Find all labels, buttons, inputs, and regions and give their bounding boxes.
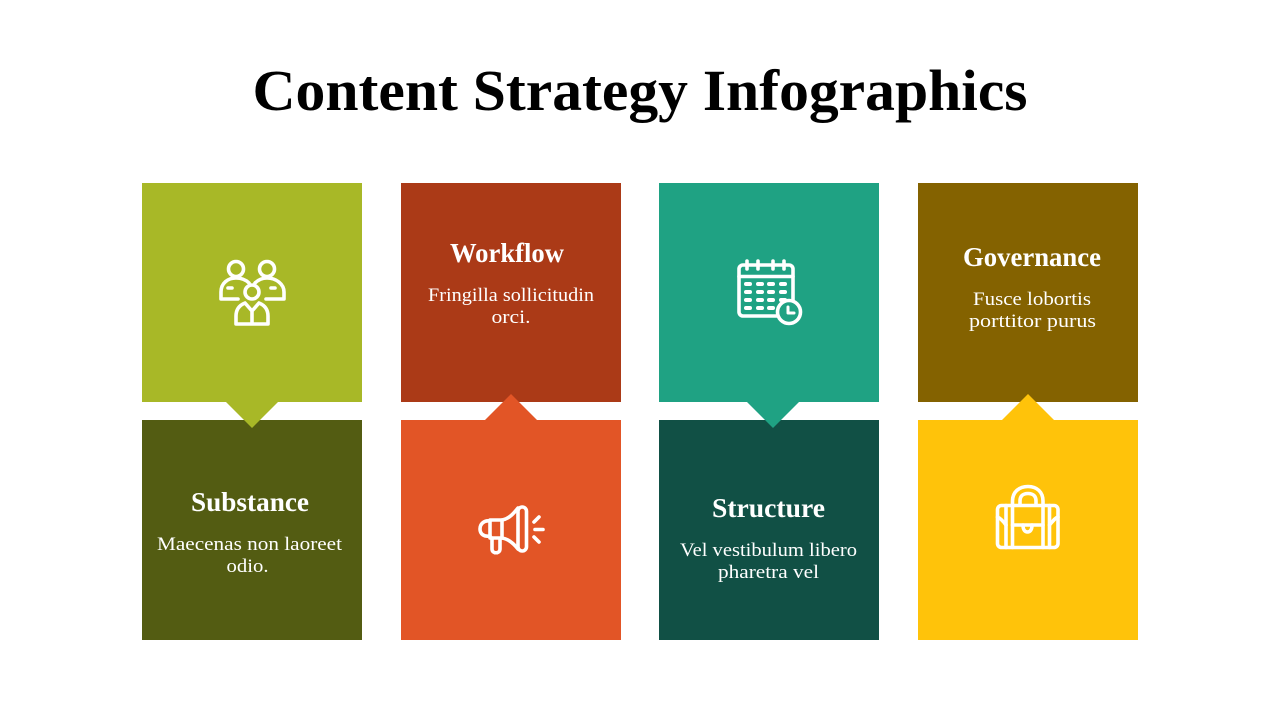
heading: Structure: Structure	[712, 493, 825, 523]
text: Substance description: odio.	[226, 557, 268, 577]
title: Content Strategy Infographics	[252, 58, 1028, 123]
text: Structure description	[680, 541, 857, 583]
icon: calendar with clock	[739, 261, 800, 324]
icon: people	[221, 262, 284, 324]
text: Substance description	[157, 535, 343, 577]
heading: Substance: Substance	[191, 487, 309, 517]
panel: governance upper card	[918, 183, 1138, 402]
panel: governance column	[918, 183, 1138, 640]
panel: substance lower card	[142, 420, 362, 640]
icon: megaphone	[480, 507, 543, 553]
heading: Governance: Governance	[963, 242, 1101, 272]
heading: Workflow: Workflow	[450, 238, 564, 268]
text: Workflow description: orci.	[492, 308, 530, 328]
text: Workflow description	[428, 286, 594, 328]
text: Structure description: pharetra vel	[718, 563, 819, 583]
panel: substance column	[142, 183, 362, 640]
panel: workflow upper card	[401, 183, 621, 402]
panel: structure column	[659, 183, 879, 640]
panel: workflow column	[401, 183, 621, 640]
text: Substance description: Maecenas non laoreet	[157, 535, 343, 555]
panel: teal icon card	[659, 183, 879, 428]
panel: green icon card	[142, 183, 362, 428]
panel: orange icon card	[401, 394, 621, 640]
text: Governance description: porttitor purus	[969, 312, 1096, 332]
text: Structure description: Vel vestibulum libero	[680, 541, 857, 561]
icon: bag	[998, 486, 1058, 548]
text: Governance description: Fusce lobortis	[973, 290, 1091, 310]
text: Workflow description: Fringilla sollicitudin	[428, 286, 594, 306]
text: Governance description	[969, 290, 1096, 332]
panel: structure lower card	[659, 420, 879, 640]
panel: yellow icon card	[918, 394, 1138, 640]
